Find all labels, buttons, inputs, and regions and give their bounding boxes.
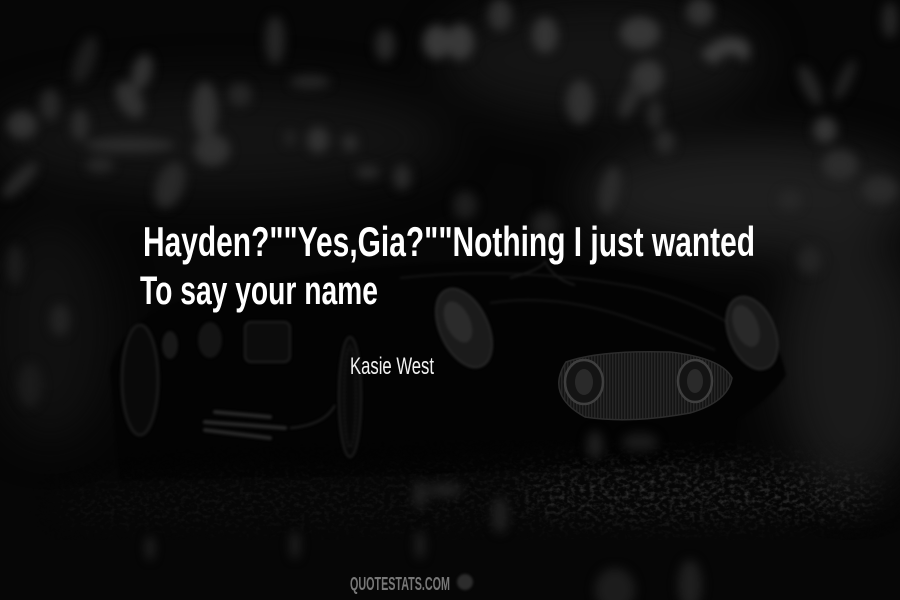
car: right headlight [716, 289, 788, 377]
ground: rough soil with reflections [106, 430, 878, 600]
watermark dot [457, 574, 473, 590]
quote line 2: To say your name [140, 269, 378, 313]
car: front grille with lamps [559, 352, 732, 420]
car: dark vintage roadster [110, 262, 788, 480]
author name: Kasie West [350, 353, 434, 380]
car: side window and door [162, 322, 335, 438]
car: rear wheel [122, 325, 361, 457]
quote text [140, 218, 755, 313]
car: left headlight [424, 280, 504, 376]
watermark: QUOTESTATS.COM [350, 574, 450, 594]
